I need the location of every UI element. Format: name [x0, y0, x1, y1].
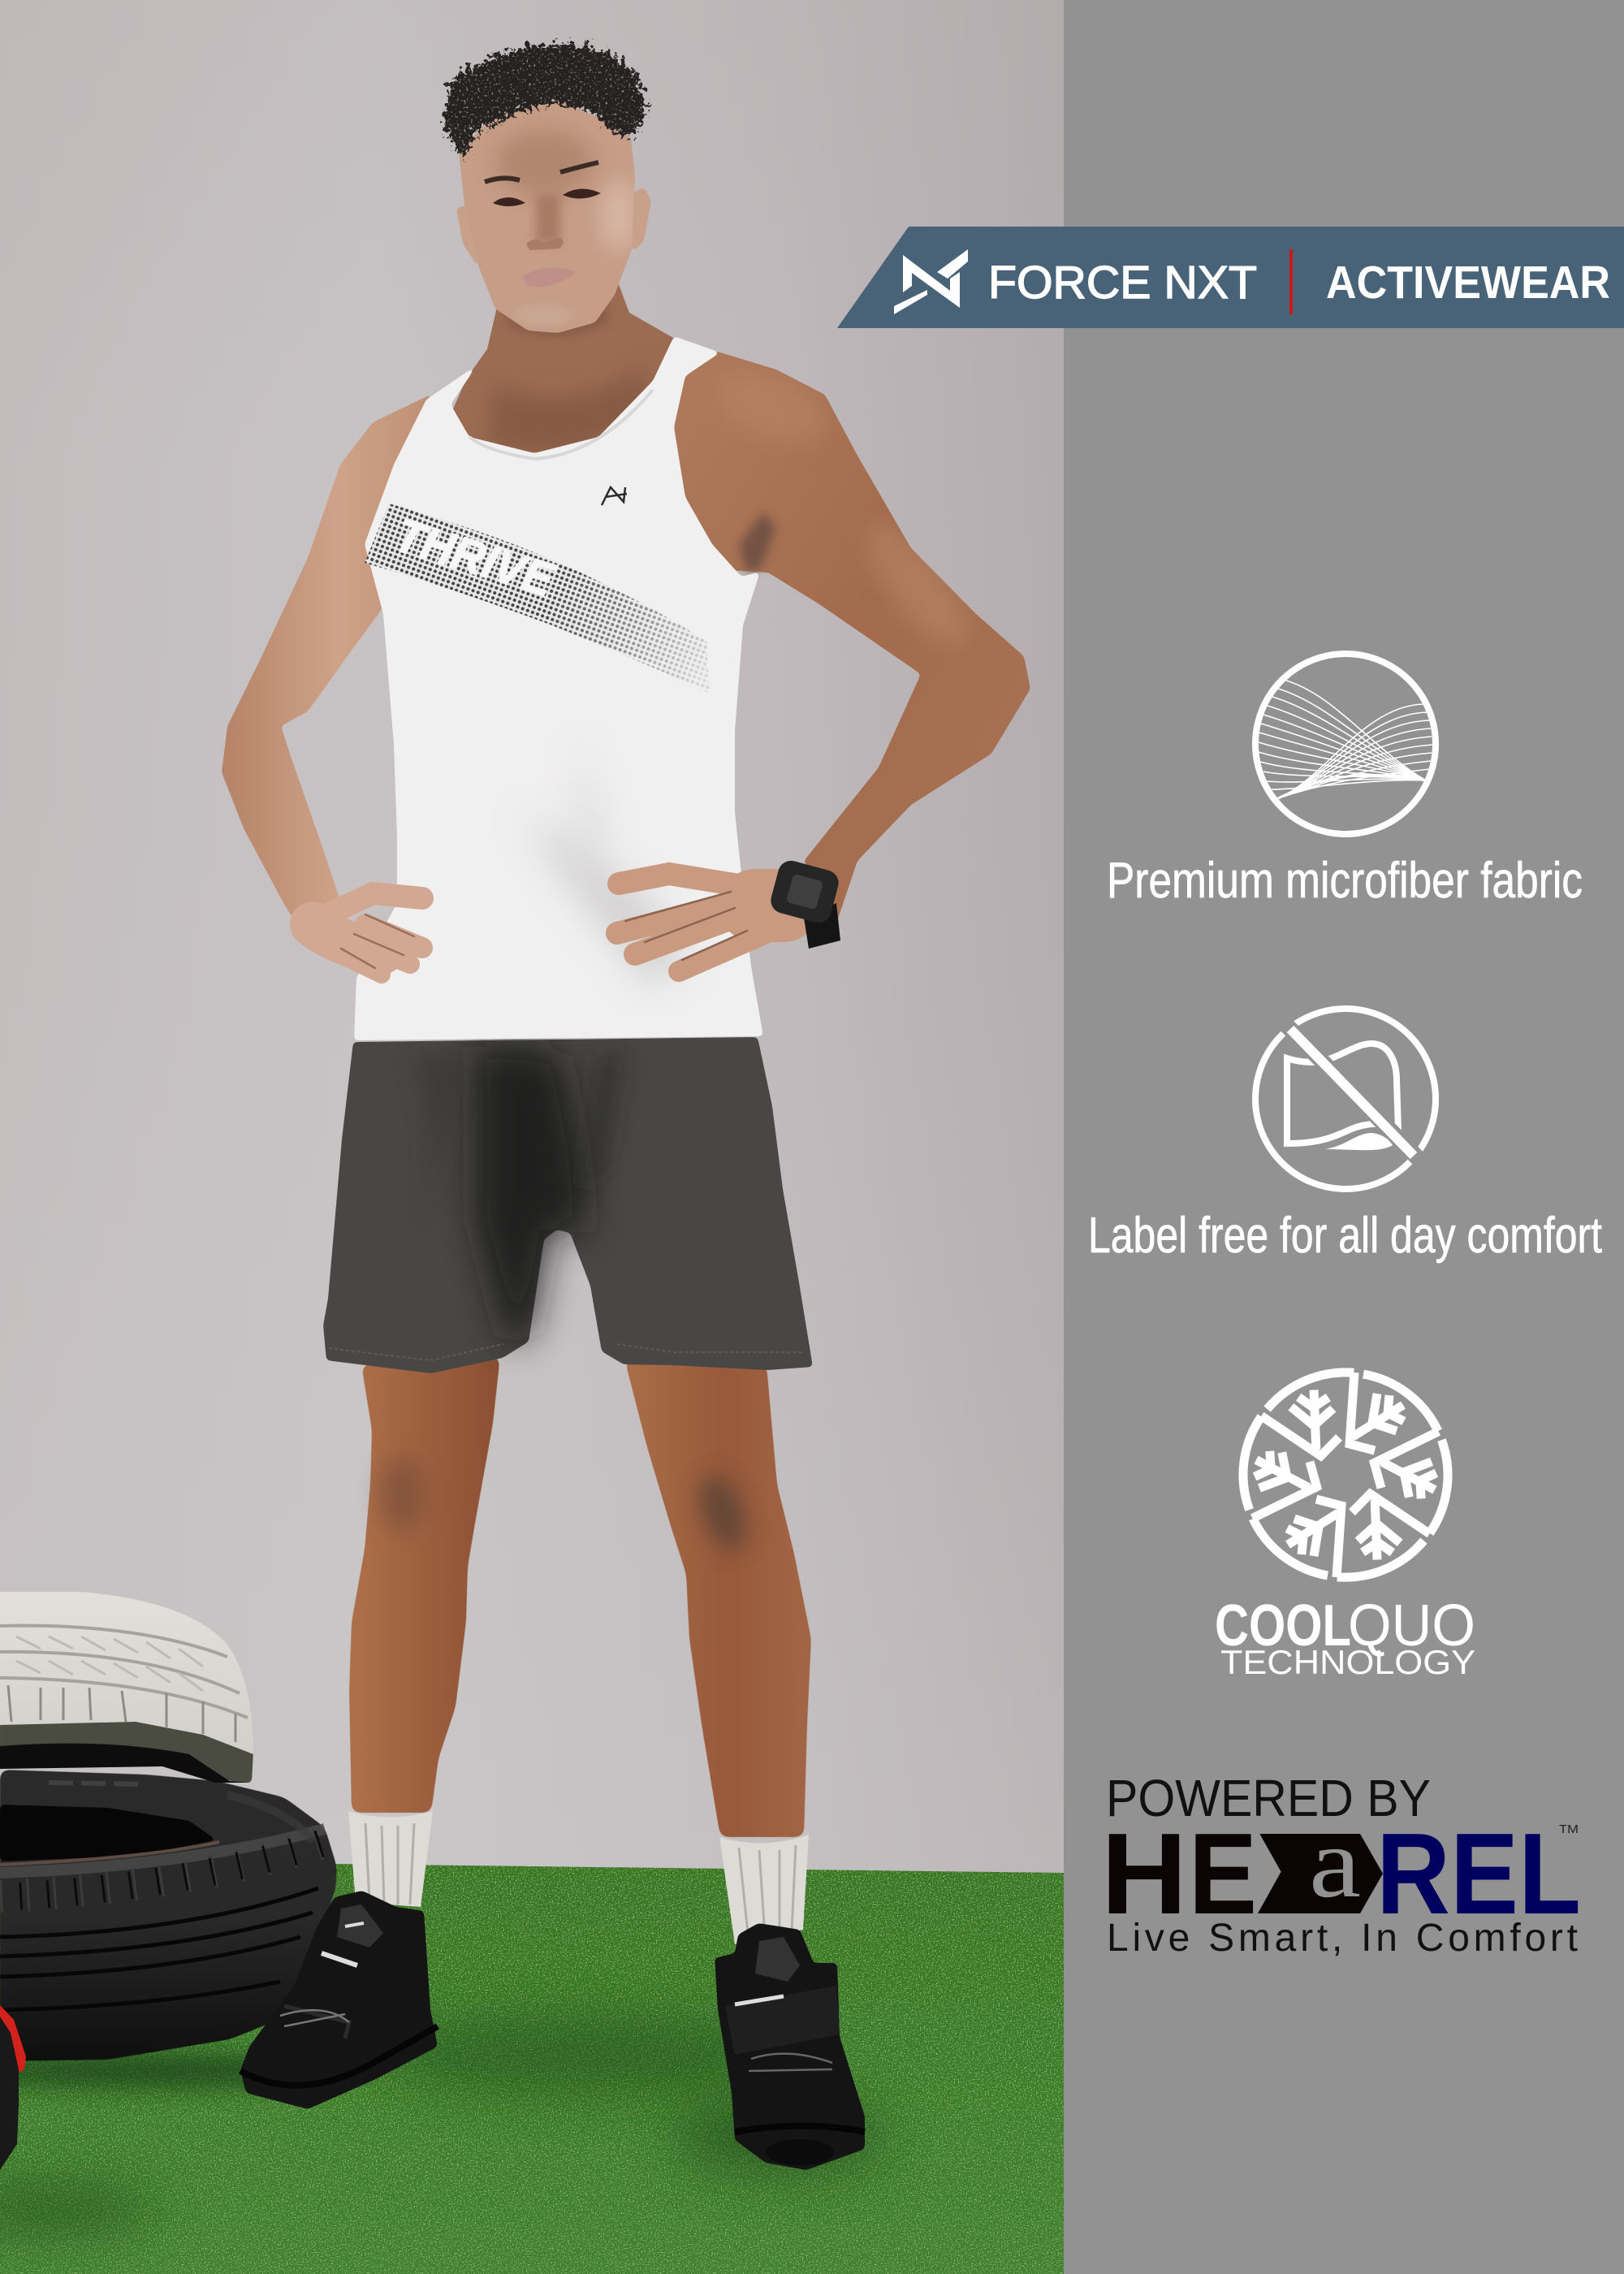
left hand	[313, 893, 422, 975]
neck and chest	[451, 280, 686, 459]
black tyre	[0, 1770, 337, 2061]
Hexarel wordmark: X	[1257, 1809, 1322, 1939]
Coolquo wordmark: TECHNOLOGY	[1220, 1643, 1475, 1681]
Hexarel wordmark: H	[1101, 1809, 1187, 1939]
face	[459, 97, 637, 333]
red divider	[1289, 249, 1293, 314]
hair	[438, 39, 643, 154]
head	[438, 39, 651, 333]
THRIVE print: THRIVE	[389, 508, 562, 607]
artificial grass floor	[0, 1860, 1064, 2274]
feature: Coolquo technology	[1211, 1343, 1480, 1681]
Hexarel wordmark: TM	[1559, 1822, 1579, 1836]
powered by heading: POWERED BY	[1106, 1769, 1431, 1827]
Coolquo wordmark: QUO	[1348, 1593, 1475, 1658]
feature: microfiber fabric	[1107, 654, 1583, 909]
left arm	[222, 395, 455, 918]
right grey panel	[1064, 0, 1624, 2274]
white tank top	[354, 336, 763, 1040]
icon: Force NXT logo	[894, 249, 968, 314]
tagline: Live Smart, In Comfort	[1107, 1917, 1578, 1960]
eyebrows	[485, 162, 598, 182]
icon: snowflake pinwheel	[1211, 1343, 1480, 1606]
brand banner	[837, 227, 1624, 328]
chest print band	[365, 504, 709, 693]
icon: crossed-out garment label	[1255, 1009, 1436, 1189]
Hexarel wordmark: REL	[1376, 1809, 1581, 1939]
photo: athlete in gym setting	[0, 0, 1064, 2274]
shorts	[323, 1037, 813, 1373]
ears	[456, 187, 651, 266]
Powered by Hexarel logo	[1101, 1769, 1581, 1960]
athlete figure	[222, 39, 1030, 2170]
nose	[526, 237, 564, 250]
left leg	[349, 1356, 500, 1813]
studio wall background	[0, 0, 1064, 1884]
Coolquo wordmark	[1215, 1593, 1475, 1681]
icon: woven fibre lines in circle	[1255, 654, 1436, 834]
Hexarel wordmark: E	[1189, 1809, 1257, 1939]
Hexarel wordmark	[1101, 1807, 1581, 1939]
red dumbbell	[0, 2005, 26, 2170]
right shoe	[715, 1923, 865, 2170]
white tyre	[0, 1592, 253, 1783]
left shoe	[240, 1891, 438, 2109]
right leg	[624, 1359, 811, 1837]
wrist watch	[768, 858, 841, 949]
feature: label free	[1088, 1009, 1602, 1264]
Hexarel wordmark: a	[1309, 1807, 1361, 1918]
right hand	[617, 874, 784, 971]
mouth	[522, 268, 577, 287]
brand name: FORCE NXT	[988, 257, 1257, 309]
eyes	[493, 188, 601, 206]
armpit shadow	[739, 512, 775, 573]
right arm	[666, 341, 1030, 926]
socks	[348, 1811, 809, 1944]
small chest logo	[602, 487, 627, 505]
Coolquo wordmark: COOL	[1215, 1593, 1351, 1658]
